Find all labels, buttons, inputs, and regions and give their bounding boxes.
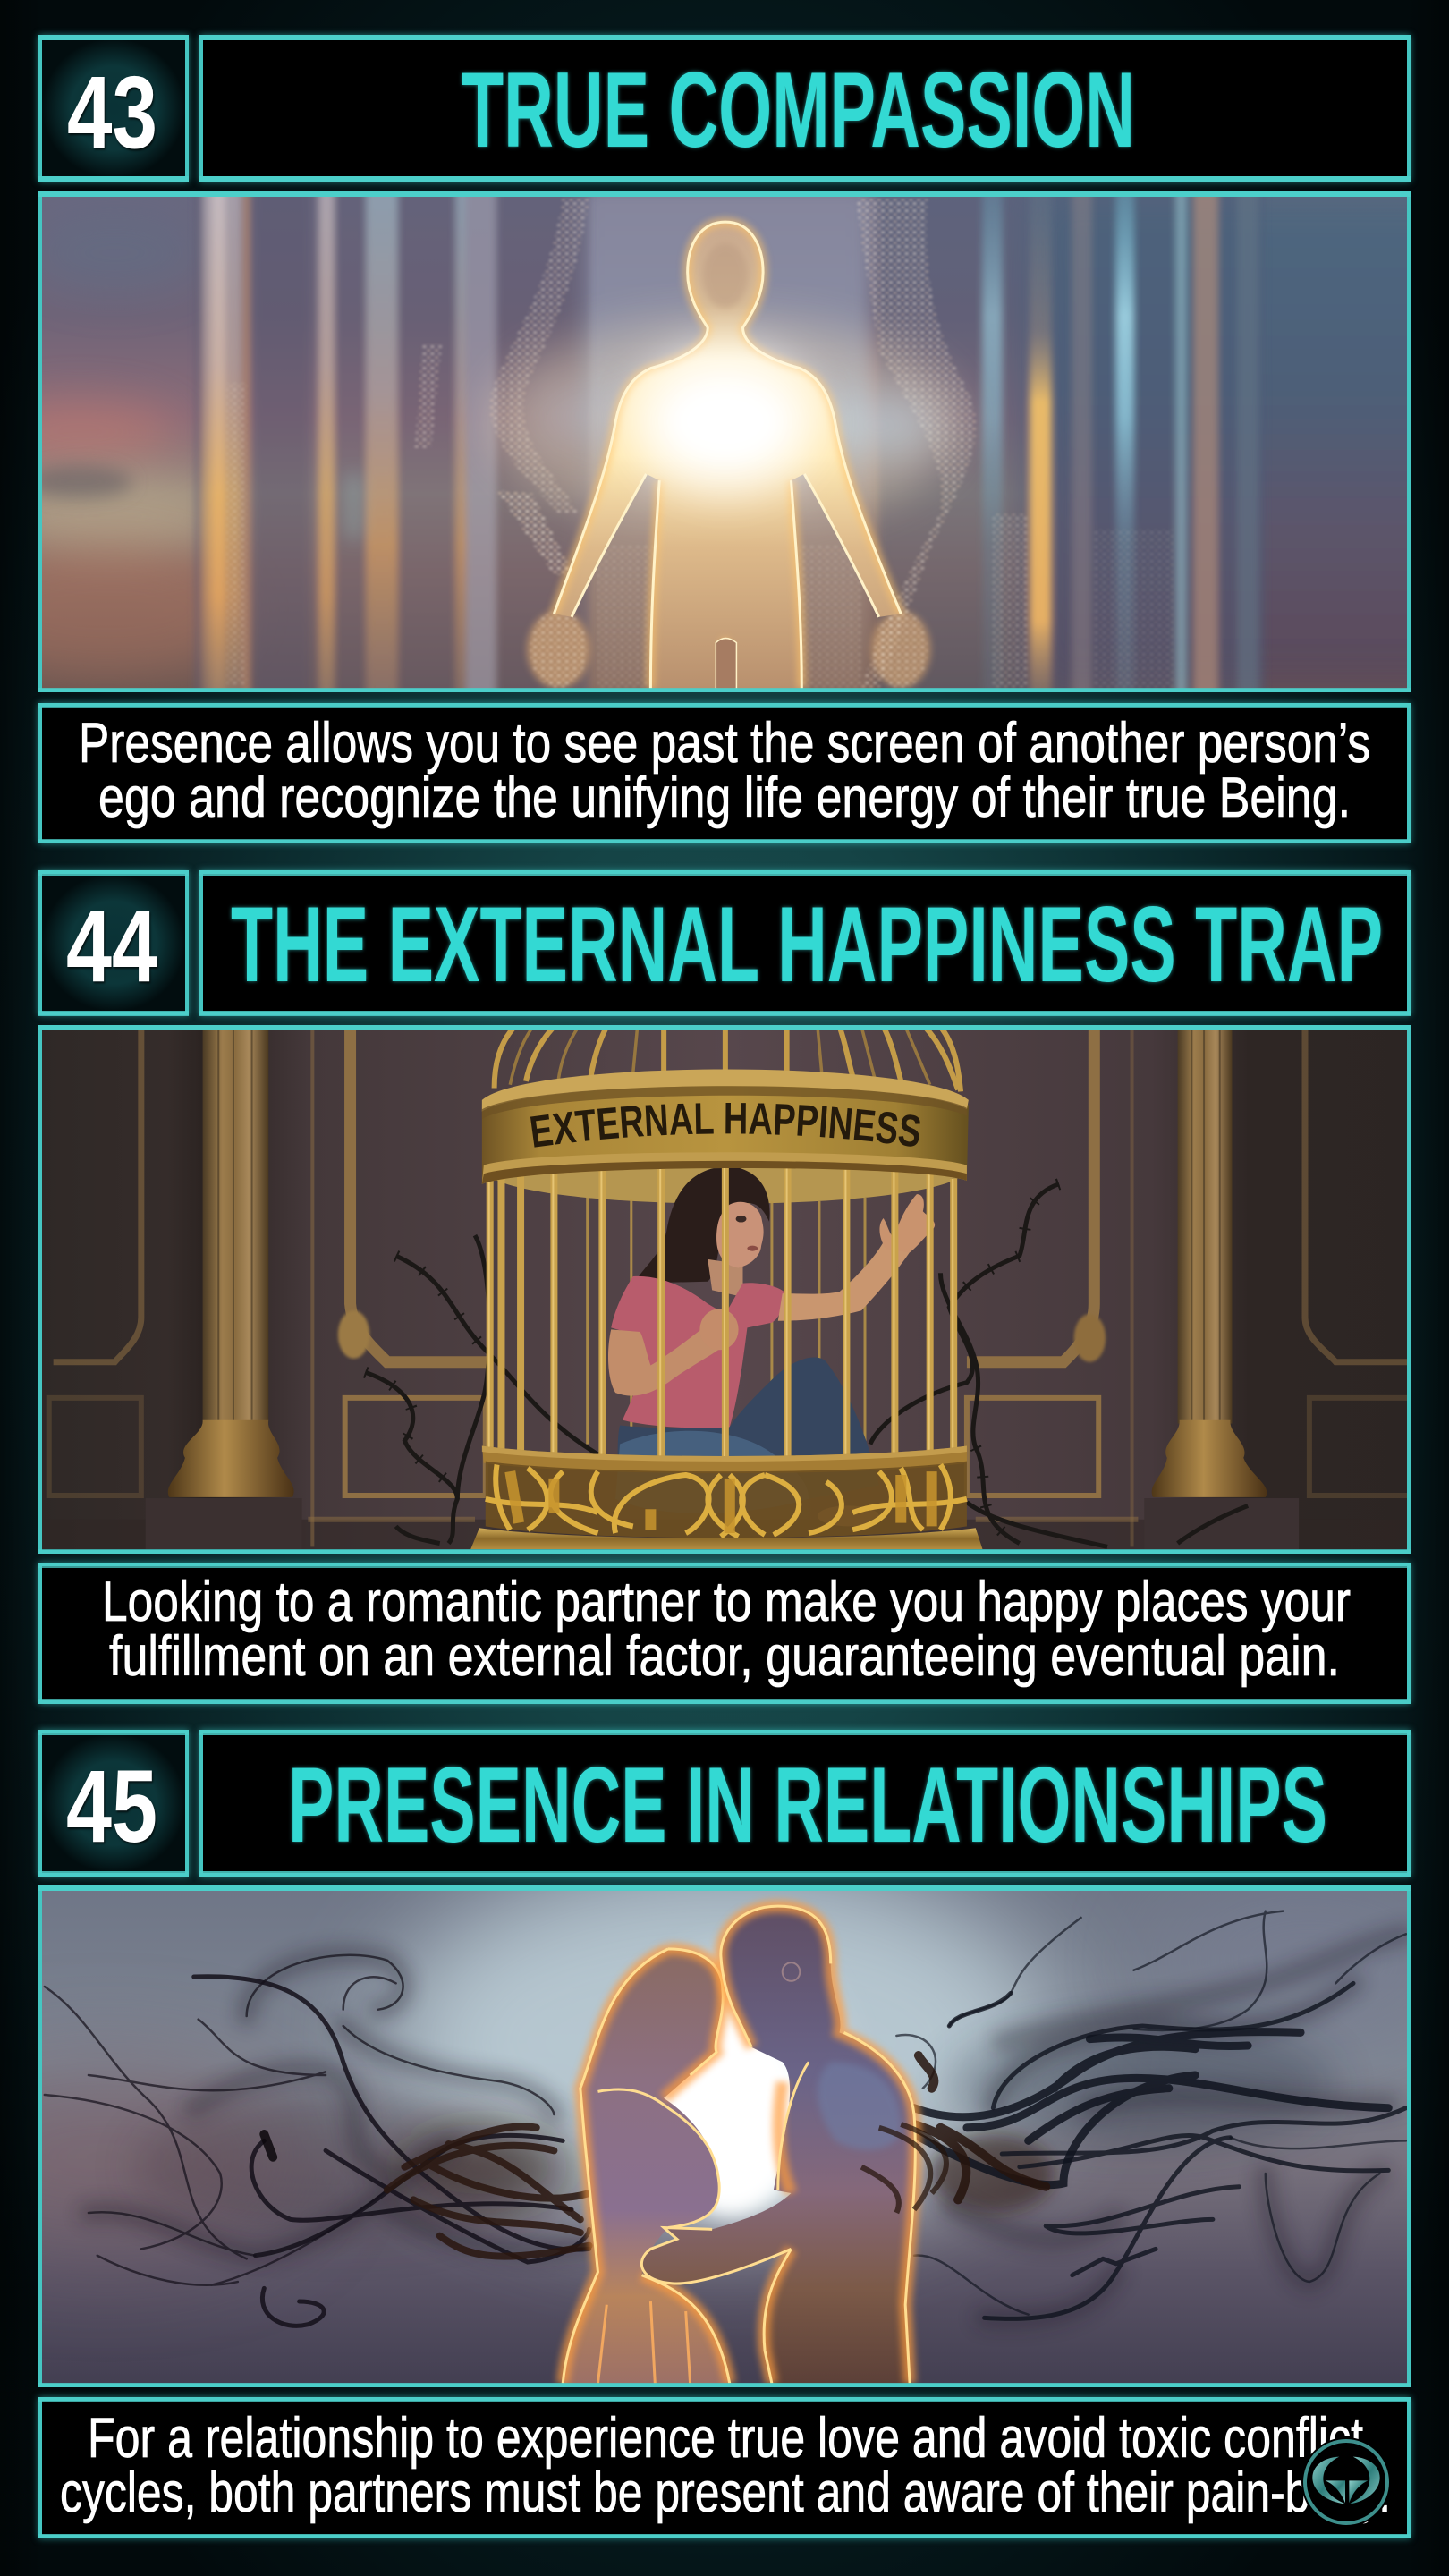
number badge 45: 45 <box>66 1750 157 1864</box>
image panel: glowing luminous figure between curtains <box>0 188 1449 698</box>
number badge 43 <box>38 35 189 182</box>
number badge 43: 43 <box>67 55 157 170</box>
smoke over man's back <box>861 2124 946 2213</box>
cage base <box>470 1528 983 1549</box>
back bars <box>588 1198 865 1451</box>
caption: external happiness trap <box>38 1563 1411 1704</box>
section 44: external happiness trap <box>34 866 1415 1708</box>
translucent smoke sheets <box>89 1934 1406 2318</box>
front bars <box>490 1163 953 1458</box>
thorny branches <box>365 1184 1248 1546</box>
right smoke strands <box>896 1911 1406 2318</box>
cage base ring <box>482 1445 967 1473</box>
chest light <box>633 351 818 494</box>
engraved label on cage band: EXTERNAL HAPPINESS <box>530 1103 920 1148</box>
caption: true compassion <box>38 703 1411 843</box>
title bar: true compassion <box>199 35 1411 182</box>
woman <box>608 1166 935 1526</box>
cage ornament panel <box>486 1462 967 1538</box>
feet <box>818 1505 879 1526</box>
glow halo <box>488 318 962 526</box>
sparkle particle bands <box>227 198 1174 689</box>
center backdrop <box>580 188 870 698</box>
jeans <box>615 1358 879 1513</box>
right curtain streaks <box>879 188 1266 698</box>
hair <box>635 1166 770 1284</box>
number badge 45 <box>38 1730 189 1877</box>
number badge 44: 44 <box>66 889 157 1004</box>
section 45: presence in relationships <box>0 1730 1449 2538</box>
arms <box>778 1242 914 1321</box>
man silhouette <box>641 1906 915 2384</box>
face and neck <box>708 1259 743 1297</box>
warm glow behind hands <box>527 611 590 689</box>
cage interior underside <box>488 1160 962 1204</box>
image panel: woman trapped in golden cage <box>38 1025 1411 1554</box>
smoke clouds <box>132 2095 537 2239</box>
woman silhouette <box>563 1949 730 2384</box>
image panel: glowing couple surrounded by dark smoke <box>0 1859 1449 2403</box>
wall moulding <box>49 1030 1415 1546</box>
left curtain streaks <box>194 188 589 698</box>
figure glow edges <box>554 222 901 689</box>
section 43: true compassion <box>0 35 1449 843</box>
figure <box>554 222 901 689</box>
caption: presence in relationships <box>38 2397 1411 2538</box>
left smoke strands <box>45 1955 589 2326</box>
watermark logo badge <box>1301 2437 1391 2527</box>
dome bars <box>495 1027 961 1091</box>
columns <box>203 1030 268 1424</box>
number badge 44 <box>38 870 189 1016</box>
cage upper band <box>482 1072 969 1184</box>
shirt <box>611 1276 784 1428</box>
